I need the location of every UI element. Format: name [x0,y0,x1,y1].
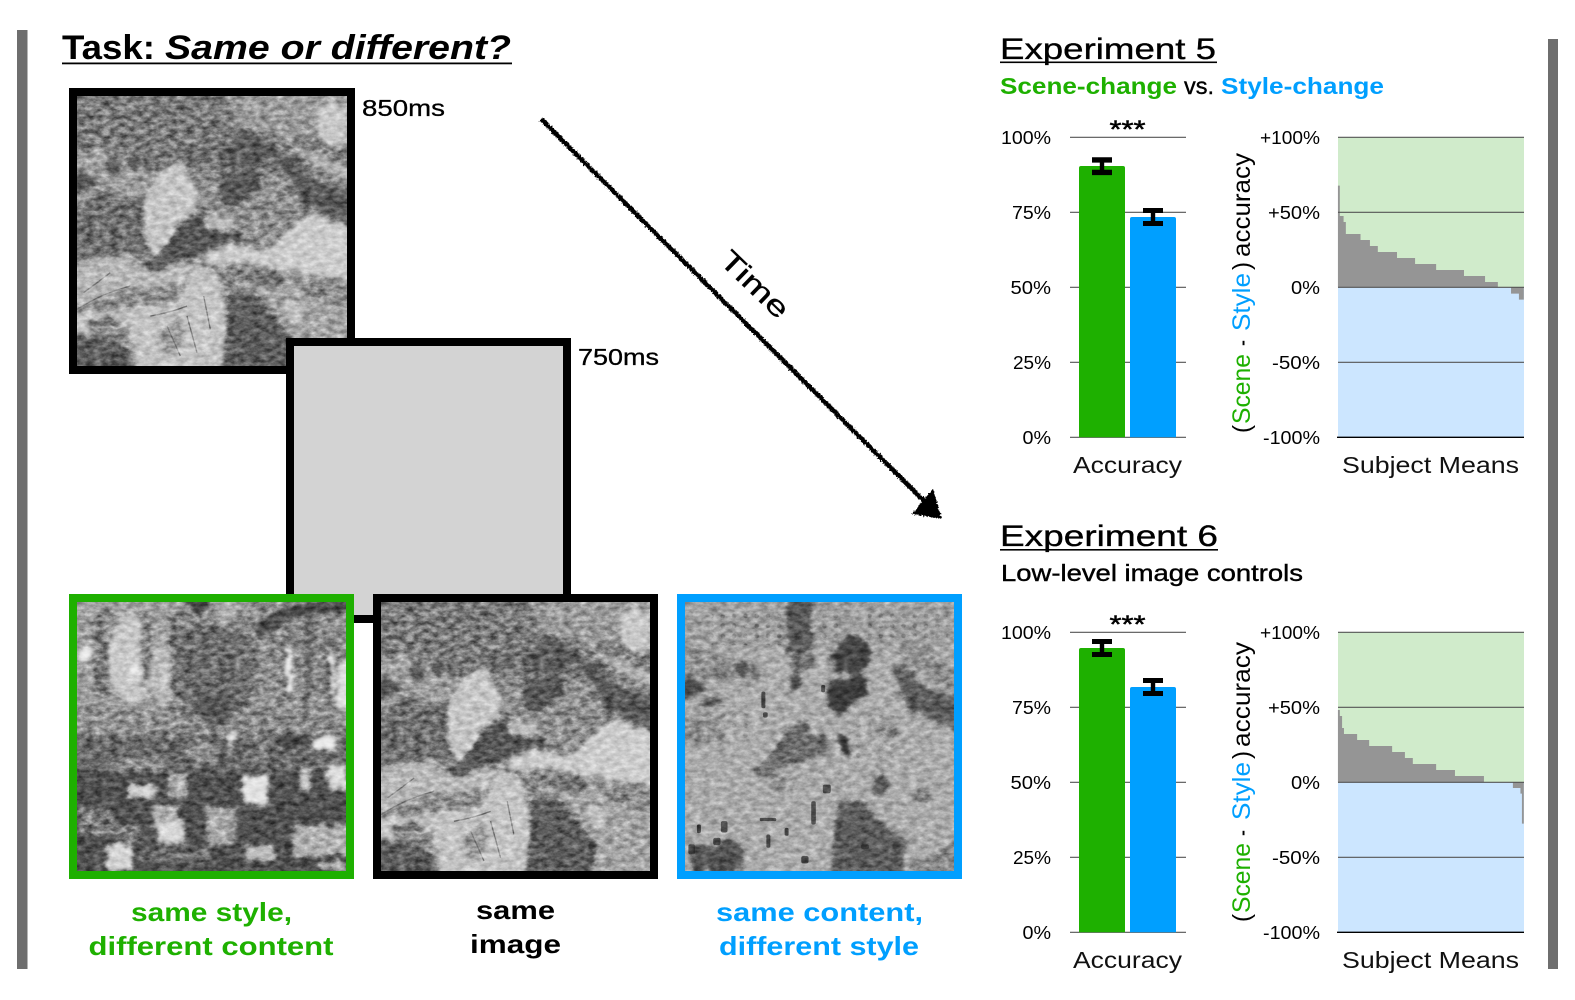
x label: subject means: Subject Means [1342,947,1519,973]
chart: subject means: -100% [1263,923,1320,943]
bar chart: accuracy: 100% [1001,623,1051,643]
chart: subject means [1260,623,1524,973]
response image: same style, different content [67,592,371,891]
chart: subject means: +50% [1268,203,1320,223]
panel: experiment 5 [1000,33,1524,478]
chart: subject means: 0% [1291,773,1320,793]
caption: same image: image [470,929,561,959]
subtitle: scene vs style [1000,73,1384,99]
chart: subject means: +100% [1260,623,1320,643]
bar: scene-change [1079,648,1125,932]
bar chart: accuracy: 100% [1001,128,1051,148]
caption: same image [470,895,561,959]
error bar: style-change [1143,678,1163,696]
axis label: scene minus style accuracy: Style [1228,762,1256,820]
bar chart: accuracy: 75% [1012,698,1051,718]
title: Task: [62,29,155,67]
subtitle: scene vs style: vs. [1184,73,1214,99]
bar chart: accuracy: 25% [1013,848,1051,868]
error bar: scene-change [1092,639,1112,657]
panel: experiment 6 [1000,520,1524,973]
bar: style-change [1130,217,1176,437]
caption: same content, different style: different style [719,931,919,961]
x label: accuracy: Accuracy [1073,452,1183,478]
chart: subject means [1260,128,1524,478]
error bar: scene-change [1092,157,1112,175]
axis label: scene minus style accuracy: ) [1228,751,1256,759]
caption: same content, different style: same content, [716,897,923,927]
caption: same style, different content: same style, [131,897,292,927]
axis label: scene minus style accuracy: Scene [1228,354,1256,424]
duration label: 850ms: 850ms [362,95,445,121]
chart: subject means: -100% [1263,428,1320,448]
caption: same content, different style [716,897,923,961]
axis label: scene minus style accuracy: accuracy [1228,641,1256,747]
title [62,29,512,67]
subtitle: scene vs style: Scene-change [1000,73,1177,99]
axis label: scene minus style accuracy [1228,152,1256,433]
axis label: scene minus style accuracy: ) [1228,262,1256,270]
x label: accuracy: Accuracy [1073,947,1183,973]
bar chart: accuracy: 50% [1010,773,1051,793]
axis label: scene minus style accuracy: ( [1228,424,1256,433]
axis label: scene minus style accuracy: Style [1228,273,1256,331]
arrow label: Time: Time [714,244,796,325]
axis label: scene minus style accuracy: accuracy [1228,152,1256,257]
bar chart: accuracy: 0% [1022,428,1051,448]
axis label: scene minus style accuracy: - [1228,830,1256,836]
bar chart: accuracy: 0% [1022,923,1051,943]
title: Same or different? [165,29,511,67]
x label: subject means: Subject Means [1342,452,1519,478]
axis label: scene minus style accuracy: Scene [1228,843,1256,913]
mask frame: grey blank [290,342,567,619]
subtitle: low-level image controls: Low-level image controls [1001,560,1303,586]
chart: subject means: +100% [1260,128,1320,148]
subject difference steps [1338,186,1524,300]
bar chart: accuracy: *** [1110,116,1146,144]
bar chart: accuracy: *** [1110,611,1146,639]
chart: subject means: +50% [1268,698,1320,718]
bar chart: accuracy [1001,611,1186,973]
caption: same image: same [476,895,555,925]
bar chart: accuracy: 25% [1013,353,1051,373]
duration label: 750ms: 750ms [578,344,659,370]
heading: experiment 6: Experiment 6 [1000,520,1218,553]
error bar: style-change [1143,208,1163,226]
right grey rule [1548,39,1558,969]
chart: subject means: -50% [1272,848,1320,868]
caption: same style, different content: different content [88,931,334,961]
subject difference steps [1338,710,1524,824]
left grey rule [17,30,28,969]
axis label: scene minus style accuracy: ( [1228,913,1256,922]
arrow: time [541,119,942,519]
bar: style-change [1130,687,1176,932]
chart: subject means: -50% [1272,353,1320,373]
stimulus frame: 850ms image [67,86,360,379]
bar chart: accuracy: 50% [1010,278,1051,298]
axis label: scene minus style accuracy: - [1228,340,1256,346]
heading: experiment 5: Experiment 5 [1000,33,1216,66]
chart: subject means: 0% [1291,278,1320,298]
caption: same style, different content [88,897,334,961]
bar: scene-change [1079,166,1125,437]
response image: same image [371,592,663,884]
subtitle: scene vs style: Style-change [1221,73,1384,99]
response image: same content, different style [675,592,967,884]
bar chart: accuracy [1001,116,1186,478]
bar chart: accuracy: 75% [1012,203,1051,223]
axis label: scene minus style accuracy [1228,641,1256,922]
